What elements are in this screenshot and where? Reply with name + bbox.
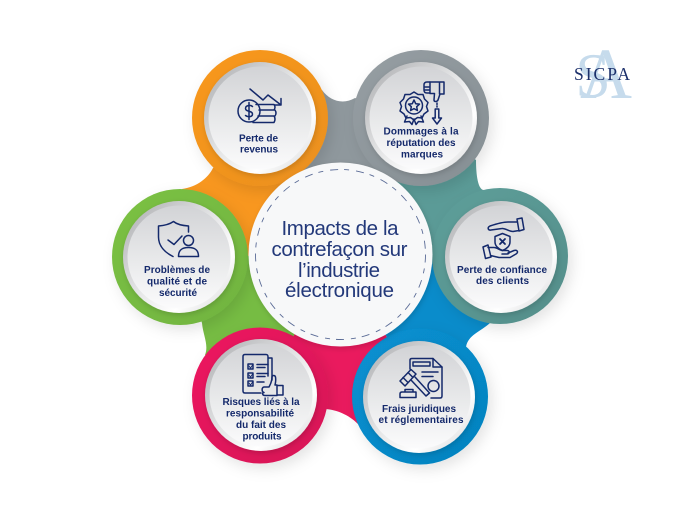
panel: frais juridiques et réglementaires <box>352 328 488 464</box>
label: des clients <box>476 276 529 287</box>
title <box>272 217 408 302</box>
center circle <box>248 162 432 346</box>
title: contrefaçon sur <box>272 238 408 261</box>
label: qualité et de <box>147 276 207 288</box>
label: Perte de confiance <box>457 265 547 276</box>
logo: SICPA: SICPA <box>574 64 630 84</box>
title: l’industrie <box>298 259 380 282</box>
label <box>144 265 210 299</box>
icon: hands and shield <box>483 218 524 258</box>
label: Frais juridiques <box>382 404 456 415</box>
label: Perte de <box>239 134 278 144</box>
label <box>239 134 278 156</box>
panel: risques liés à la responsabilité <box>192 328 328 464</box>
panel: problèmes de qualité et de sécurité <box>112 189 248 325</box>
icon: badge and thumb down <box>400 82 444 124</box>
icon: coin and falling arrow <box>238 89 281 122</box>
logo: SICPA: A <box>580 34 632 114</box>
label: revenus <box>240 144 278 156</box>
label: du fait des <box>236 420 286 431</box>
label: produits <box>242 432 282 442</box>
logo: SICPA: S <box>575 40 611 111</box>
icon: shield and person <box>158 222 198 256</box>
panel: perte de revenus <box>192 50 328 186</box>
label: responsabilité <box>226 408 294 420</box>
label <box>457 265 547 287</box>
label: Risques liés à la <box>222 397 300 408</box>
label <box>222 397 300 442</box>
connector shapes between circles <box>180 90 500 424</box>
label <box>378 404 464 426</box>
panel: perte de confiance des clients <box>432 188 568 324</box>
label: et réglementaires <box>378 415 464 426</box>
title: électronique <box>285 279 394 302</box>
label: Problèmes de <box>144 265 210 276</box>
panel: dommages à la réputation <box>353 50 489 186</box>
label: Dommages à la <box>384 126 459 138</box>
label: réputation des <box>386 138 456 149</box>
icon: checklist and thumb up <box>243 354 283 396</box>
label: marques <box>401 150 443 160</box>
icon: gavel and document <box>400 358 442 398</box>
label: sécurité <box>159 288 197 299</box>
title: Impacts de la <box>282 217 399 240</box>
label <box>384 126 459 160</box>
